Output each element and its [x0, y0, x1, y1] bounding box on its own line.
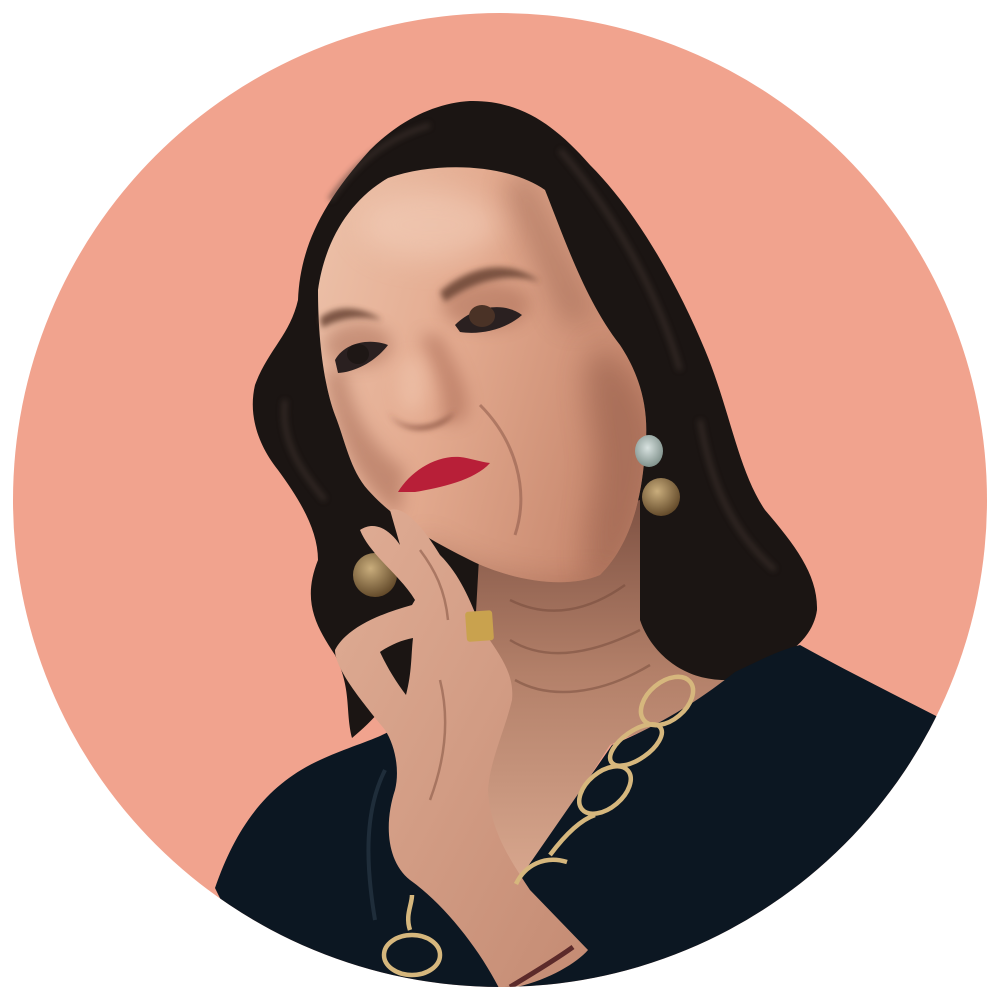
left eye	[335, 342, 388, 373]
face shading	[324, 165, 656, 610]
left eyebrow	[320, 308, 382, 328]
nose tip	[388, 412, 455, 429]
earring: left gold ball	[353, 553, 397, 597]
hand	[335, 509, 588, 990]
right eye	[455, 305, 522, 333]
ring	[465, 610, 494, 642]
face	[318, 167, 646, 582]
gap between fingers	[380, 638, 413, 695]
hairline shadow	[505, 165, 595, 325]
lips	[398, 457, 490, 492]
chin shadow	[432, 539, 589, 582]
hair highlights	[284, 125, 775, 570]
smile line	[480, 405, 521, 535]
earring: pearl and gold ball	[635, 435, 680, 516]
neck wrinkles	[510, 585, 650, 692]
nose highlight	[400, 362, 426, 408]
hair	[253, 101, 817, 738]
eye socket shadows	[324, 323, 392, 367]
right cheek shadow	[586, 345, 656, 595]
nose side shadow	[420, 335, 468, 425]
jacket fold	[368, 770, 385, 920]
neck	[470, 500, 725, 885]
right eyebrow	[440, 267, 540, 302]
left cheek shadow	[325, 370, 405, 515]
figure	[215, 101, 940, 1000]
necklace	[384, 667, 702, 975]
finger creases	[420, 550, 448, 800]
bracelet	[510, 947, 573, 987]
jacket	[215, 645, 940, 1000]
forehead highlight	[360, 190, 500, 260]
